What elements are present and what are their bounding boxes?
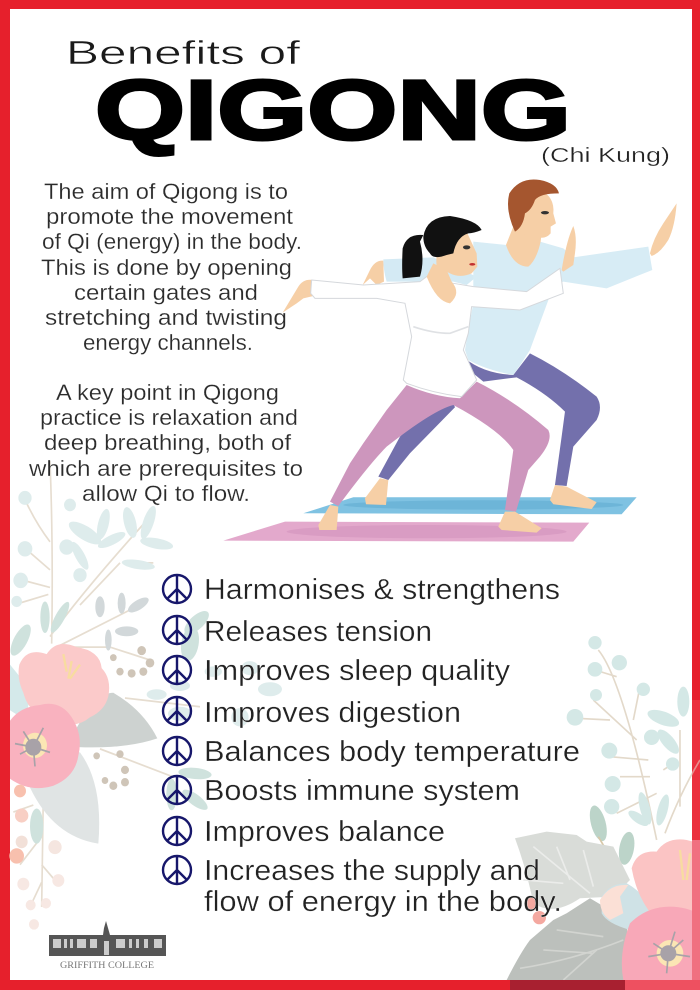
item 5: Balances body temperature (204, 736, 580, 768)
intro paragraph: stretching and twisting (45, 305, 287, 330)
intro paragraph: The aim of Qigong is to (44, 179, 288, 204)
item 8 (204, 855, 562, 918)
gray leaf (77, 693, 157, 747)
lower pink flower (10, 704, 80, 788)
bullet: peace icon 1 (163, 575, 191, 603)
benefits list (163, 574, 580, 918)
item 8: flow of energy in the body. (204, 886, 562, 918)
key point paragraph: allow Qi to flow. (82, 481, 250, 506)
item 4: Improves digestion (204, 697, 461, 729)
bullet: peace icon 5 (163, 737, 191, 765)
upper pink flower (632, 839, 700, 920)
item 6: Boosts immune system (204, 775, 520, 807)
intro paragraph: energy channels. (83, 330, 253, 355)
blue bud (602, 883, 652, 930)
logo: Griffith College: GRIFFITH COLLEGE (60, 960, 155, 970)
title: Benefits of: Benefits of (66, 34, 301, 71)
upper pink flower (19, 644, 109, 724)
key point paragraph: practice is relaxation and (40, 405, 298, 430)
intro paragraph: This is done by opening (41, 255, 292, 280)
bullet: peace icon 4 (163, 697, 191, 725)
bullet: peace icon 3 (163, 656, 191, 684)
floral decoration: right bouquet (507, 636, 700, 980)
pink mat (223, 522, 589, 542)
floral decoration: left bouquet (7, 461, 282, 930)
intro paragraph: certain gates and (74, 280, 258, 305)
intro paragraph (41, 179, 302, 355)
item 7: Improves balance (204, 816, 445, 848)
bullet: peace icon 2 (163, 616, 191, 644)
key point paragraph (28, 380, 303, 506)
item 8: Increases the supply and (204, 855, 540, 887)
key point paragraph: A key point in Qigong (56, 380, 279, 405)
bullet: peace icon 6 (163, 776, 191, 804)
item 3: Improves sleep quality (204, 655, 511, 687)
man (363, 179, 677, 509)
intro paragraph: of Qi (energy) in the body. (42, 229, 302, 254)
blue mat (303, 497, 637, 514)
intro paragraph: promote the movement (46, 204, 293, 229)
logo: Griffith College (49, 921, 166, 970)
pale leaf (30, 752, 99, 844)
illustration: couple practising qigong (223, 179, 677, 542)
key point paragraph: which are prerequisites to (28, 456, 303, 481)
subtitle: Chi Kung: (Chi Kung) (541, 145, 670, 167)
berries (525, 898, 538, 911)
woman (283, 216, 576, 533)
lower pink flower (622, 907, 700, 980)
bullet: peace icon 7 (163, 817, 191, 845)
title: QIGONG: QIGONG (95, 63, 571, 157)
large pale leaf (515, 832, 630, 909)
bullet: peace icon 8 (163, 856, 191, 884)
large dark leaf (507, 898, 630, 980)
translucent overlay: flowers over border (510, 700, 700, 990)
key point paragraph: deep breathing, both of (44, 430, 292, 455)
item 1: Harmonises & strengthens (204, 574, 560, 606)
item 2: Releases tension (204, 616, 432, 648)
